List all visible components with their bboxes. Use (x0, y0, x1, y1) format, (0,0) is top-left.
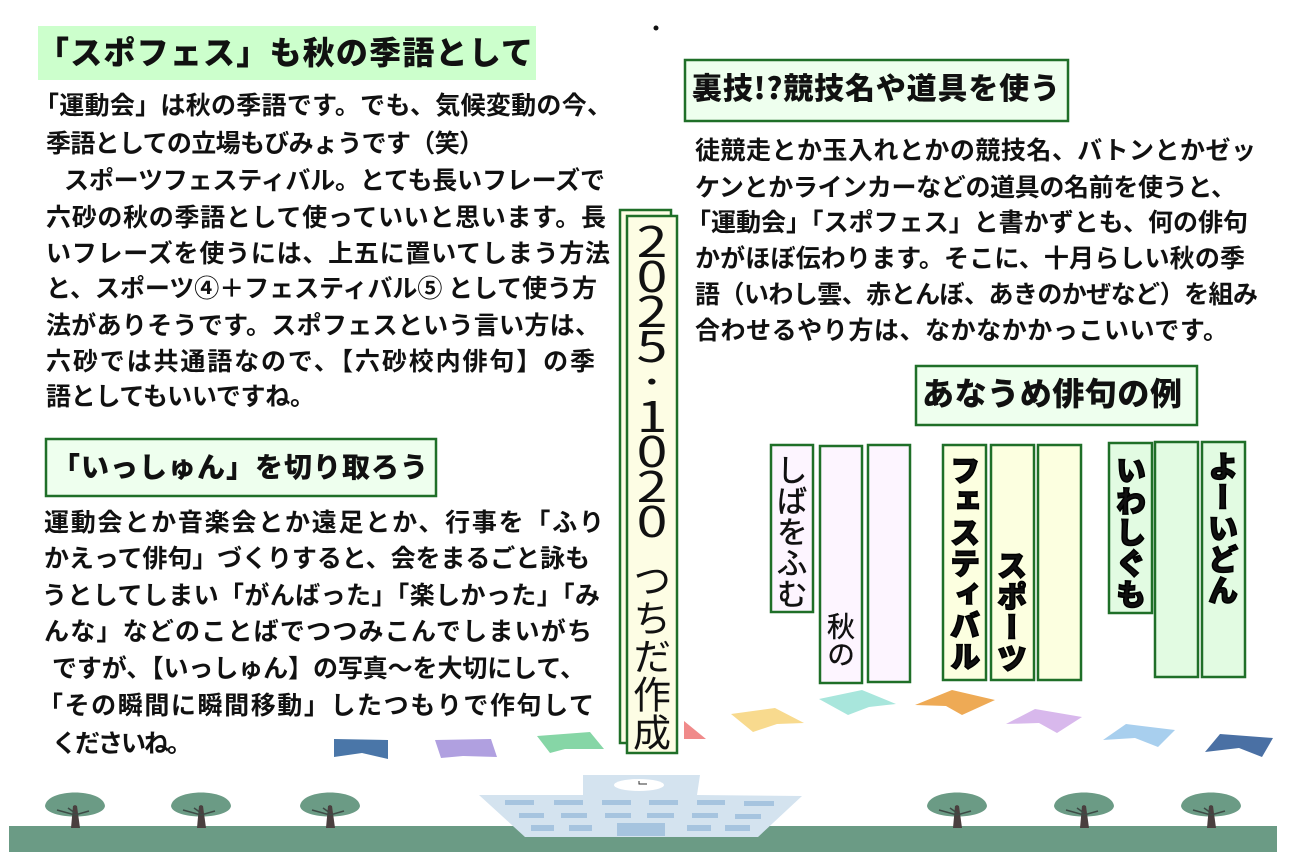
heading: cut out a moment (46, 439, 436, 496)
text block: cut out a moment: かえって俳句」づくりすると、会をまるごと詠も (44, 539, 590, 575)
heading: trick, use event names and equipment (685, 60, 1068, 121)
text block: trick: ケンとかラインカーなどの道具の名前を使うと、 (695, 168, 1236, 204)
text block: trick: 語（いわし雲、赤とんぼ、あきのかぜなど）を組み (695, 275, 1258, 311)
text block: cut out a moment: 「その瞬間に瞬間移動」したつもりで作句して (38, 686, 594, 722)
text block: sports festival: 語としてもいいですね。 (46, 377, 315, 413)
haiku example 1 (770, 445, 910, 683)
text block: sports festival: スポーツフェスティバル。とても長いフレーズで (64, 161, 605, 197)
text block: sports festival: 季語としての立場もびみょうです（笑） (46, 124, 484, 160)
haiku example 1: 秋の (821, 612, 861, 668)
text block: cut out a moment: うとしてしまい「がんばった」「楽しかった」「み (42, 576, 600, 612)
text block: trick: かがほぼ伝わります。そこに、十月らしい秋の季 (695, 239, 1245, 275)
school building (479, 775, 802, 837)
date and author tag: 2025·1020 (612, 220, 692, 538)
text block: trick (686, 131, 1258, 347)
ground (9, 826, 1277, 852)
haiku example 3: いわしぐも (1109, 455, 1153, 610)
text block: sports festival: 六砂では共通語なので、【六砂校内俳句】の季 (46, 342, 595, 378)
haiku example 2: スポーツ (990, 550, 1034, 674)
haiku example 2: フェスティバル (943, 455, 987, 672)
text block: trick: 徒競走とか玉入れとかの競技名、バトンとかゼッ (695, 131, 1256, 167)
date and author tag (612, 210, 692, 753)
haiku example 1: しばをふむ (770, 454, 814, 609)
date and author tag: つちだ作成 (624, 561, 680, 751)
haiku example 2 (943, 445, 1081, 680)
bunting flags (334, 690, 1273, 759)
text block: cut out a moment: ですが、【いっしゅん】の写真～を大切にして、 (52, 649, 585, 685)
trees (45, 792, 1241, 828)
heading: cut out a moment: 「いっしゅん」を切り取ろう (52, 446, 428, 486)
text block: sports festival: 六砂の秋の季語として使っていいと思います。長 (46, 198, 606, 234)
text block: cut out a moment: くださいね。 (52, 724, 192, 760)
text block: sports festival: と、スポーツ④＋フェスティバル⑤ として使う方 (46, 269, 597, 305)
text block: cut out a moment (38, 503, 604, 760)
text block: trick: 合わせるやり方は、なかなかかっこいいです。 (695, 311, 1228, 347)
text block: sports festival: いフレーズを使うには、上五に置いてしまう方法 (46, 234, 610, 270)
text block: trick: 「運動会」「スポフェス」と書かずとも、何の俳句 (686, 203, 1248, 239)
text block: sports festival: 法がありそうです。スポフェスという言い方は、 (46, 306, 600, 342)
heading: fill-in-the-blank haiku examples: あなうめ俳句の例 (922, 369, 1182, 415)
haiku example 3 (1109, 442, 1245, 677)
text block: sports festival (34, 86, 612, 413)
text block: cut out a moment: 運動会とか音楽会とか遠足とか、行事を「ふり (44, 503, 604, 539)
haiku example 3: よーいどん (1201, 451, 1245, 606)
text block: sports festival: 「運動会」は秋の季語です。でも、気候変動の今、 (34, 86, 612, 122)
heading: trick, use event names and equipment: 裏技!?競技名や道具を使う (692, 64, 1060, 108)
text block: cut out a moment: んな」などのことばでつつみこんでしまいがち (44, 612, 592, 648)
heading: sports festival as autumn kigo: 「スポフェス」も秋の季語として (37, 28, 533, 74)
